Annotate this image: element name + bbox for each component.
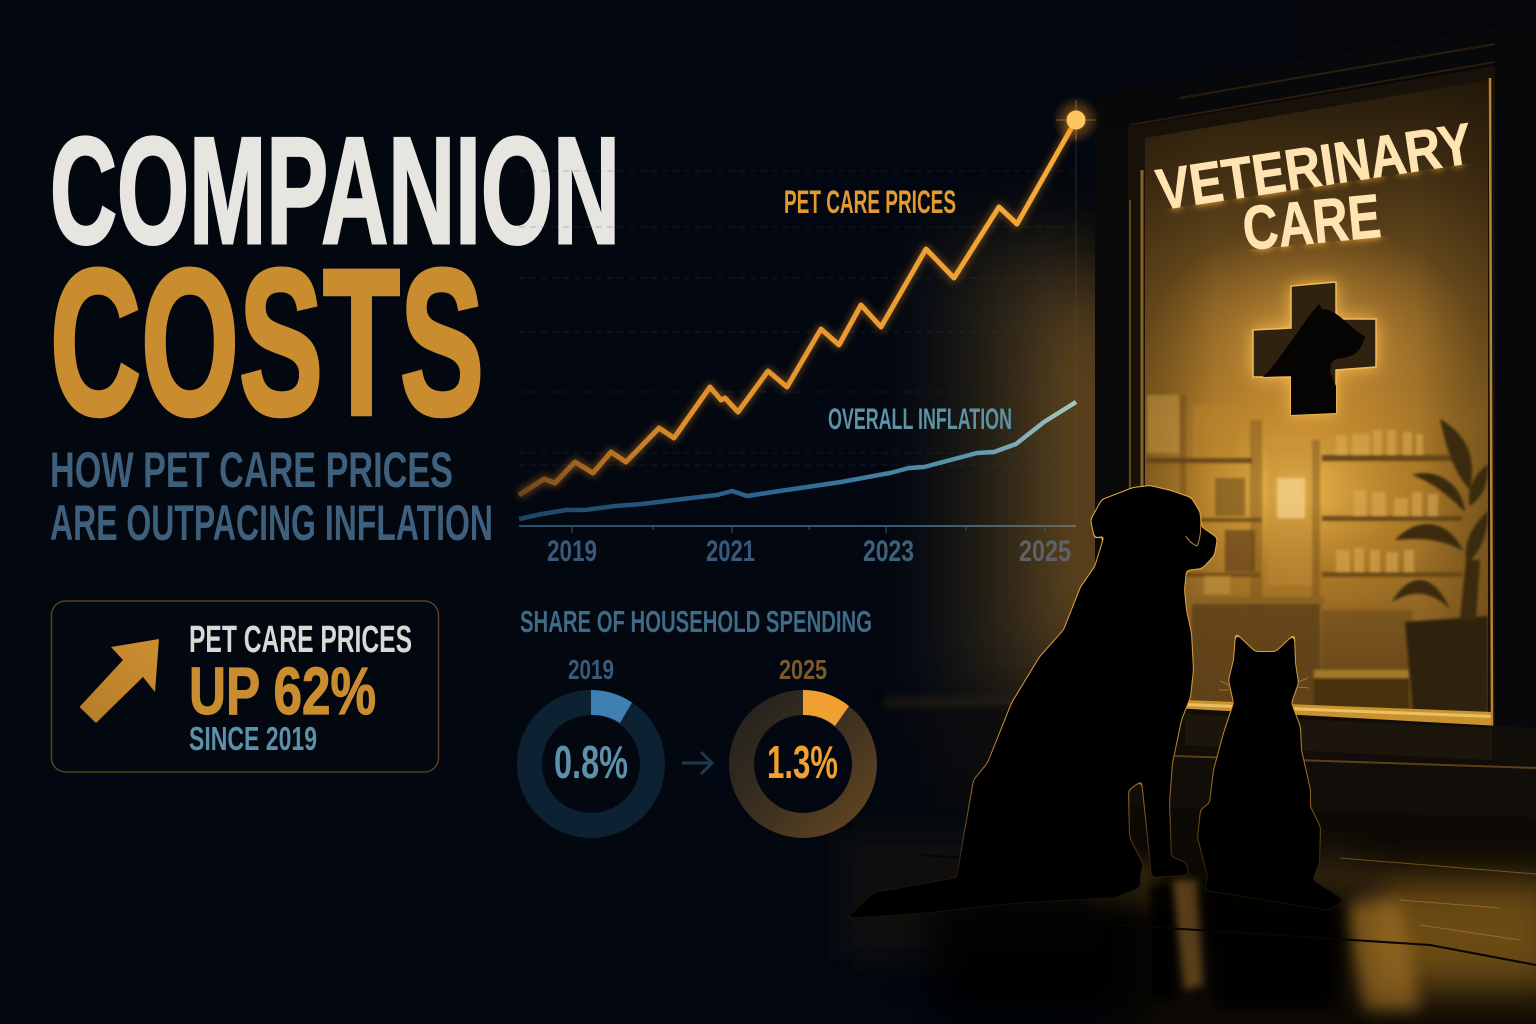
title bbox=[50, 106, 620, 459]
subtitle: HOW PET CARE PRICES bbox=[50, 442, 453, 498]
dog ear edge bbox=[1186, 513, 1201, 546]
window sill light bbox=[1185, 700, 1492, 726]
sign line two: CARE bbox=[1240, 182, 1384, 264]
panel: household spending bbox=[520, 604, 872, 826]
wall base under window bbox=[1100, 704, 1536, 818]
counter bbox=[1188, 597, 1412, 710]
cat body bbox=[1198, 634, 1343, 910]
overall inflation line bbox=[519, 402, 1076, 519]
cat whiskers bbox=[1219, 678, 1309, 690]
panel: storefront bbox=[1095, 20, 1536, 818]
wall glow behind chart bbox=[950, 240, 1110, 710]
callout label: PET CARE PRICES bbox=[189, 619, 412, 661]
window frame bbox=[1128, 66, 1495, 727]
top trim bbox=[1130, 44, 1495, 125]
floor left texture bbox=[840, 830, 1140, 960]
callout value: UP 62% bbox=[189, 654, 376, 729]
donut 2019: 0.8% bbox=[554, 736, 628, 788]
floor bbox=[920, 806, 1536, 1024]
subtitle: ARE OUTPACING INFLATION bbox=[50, 495, 493, 551]
dog rim light bbox=[847, 486, 1217, 918]
sign: veterinary care: CARE bbox=[1240, 182, 1384, 264]
line chart bbox=[519, 96, 1100, 568]
title line one: COMPANION bbox=[50, 106, 620, 276]
donut 2019 bbox=[530, 690, 652, 826]
left shelves bbox=[1146, 395, 1262, 610]
x axis years: 2025 bbox=[1019, 535, 1071, 568]
dog head bbox=[1263, 304, 1365, 415]
year label 2025: 2025 bbox=[779, 654, 827, 685]
x axis years: 2023 bbox=[863, 535, 914, 568]
arrow between donuts bbox=[682, 752, 712, 774]
window left edge bbox=[1140, 170, 1144, 700]
icon: up arrow bbox=[80, 639, 159, 723]
callout since: SINCE 2019 bbox=[189, 720, 317, 757]
endpoint marker bbox=[1052, 96, 1100, 144]
dog silhouette bbox=[847, 486, 1217, 918]
panel: price callout bbox=[52, 601, 438, 772]
sign line one: VETERINARY bbox=[1152, 111, 1476, 223]
pet care line glow bbox=[519, 120, 1076, 495]
cat rim light bbox=[1198, 634, 1343, 910]
dog body bbox=[847, 486, 1217, 918]
plant bbox=[1392, 419, 1488, 712]
x axis years: 2019 bbox=[547, 535, 597, 568]
x axis years bbox=[547, 535, 1071, 568]
pet care prices line bbox=[519, 120, 1076, 495]
donut 2025 bbox=[742, 690, 864, 826]
window right edge bbox=[1490, 78, 1492, 726]
section heading: SHARE OF HOUSEHOLD SPENDING bbox=[520, 604, 872, 639]
title line two: COSTS bbox=[50, 227, 484, 459]
right shelves bbox=[1322, 430, 1462, 577]
wall base bbox=[860, 697, 1100, 810]
donut 2025: 1.3% bbox=[767, 736, 838, 788]
sign: veterinary care: VETERINARY bbox=[1152, 111, 1476, 223]
year label 2019: 2019 bbox=[568, 654, 614, 685]
label: pet care prices: PET CARE PRICES bbox=[784, 184, 956, 220]
shop window bbox=[1145, 80, 1488, 712]
sign: veterinary care bbox=[1152, 111, 1476, 264]
subtitle bbox=[50, 442, 493, 551]
x axis years: 2021 bbox=[706, 535, 755, 568]
cat silhouette bbox=[1198, 634, 1343, 910]
label: overall inflation: OVERALL INFLATION bbox=[828, 403, 1012, 436]
centre panel bbox=[1268, 440, 1320, 610]
chart axis bbox=[519, 526, 1076, 533]
icon: veterinary cross with dog bbox=[1253, 282, 1376, 415]
